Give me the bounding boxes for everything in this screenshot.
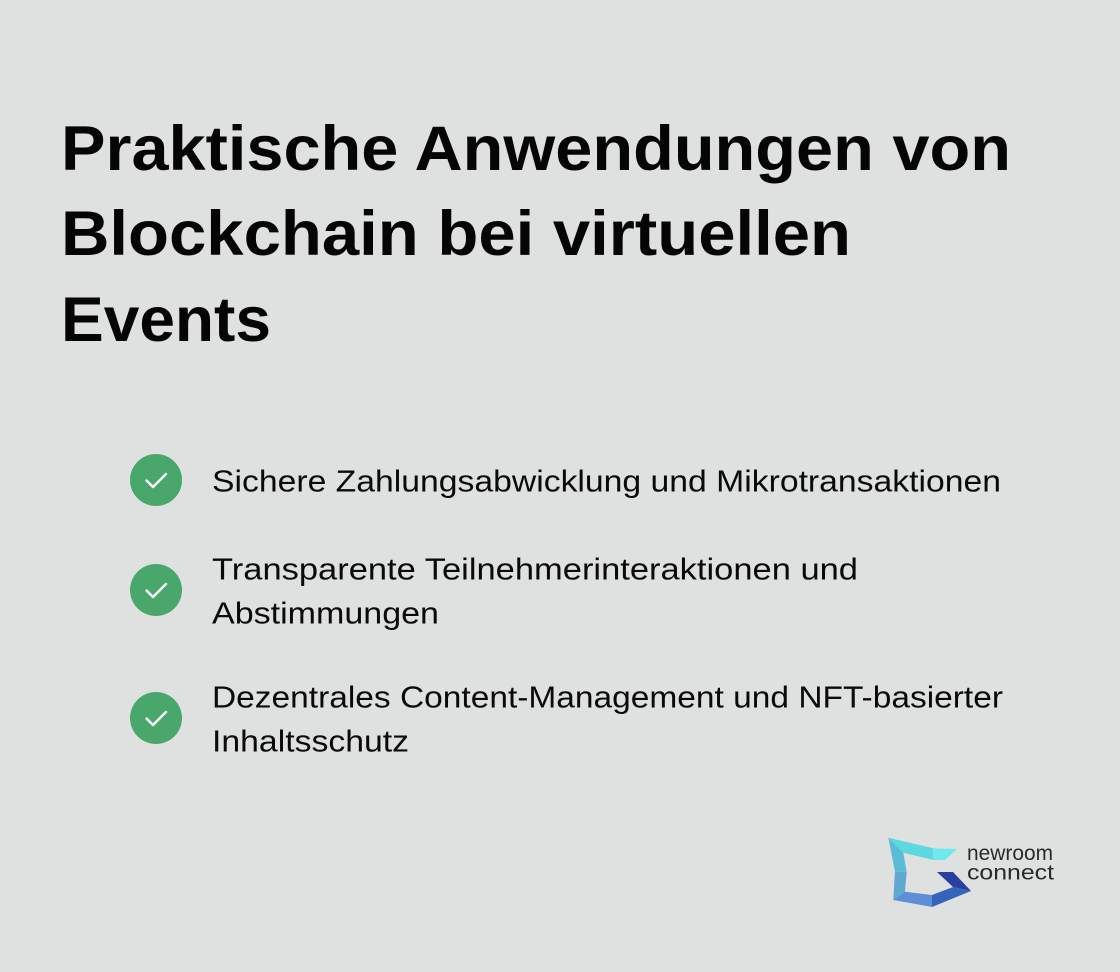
logo mark [888, 838, 971, 907]
icon: check mark [130, 692, 182, 744]
item text: Abstimmungen [212, 596, 439, 630]
list item: content management [130, 680, 1003, 758]
title: Praktische Anwendungen von [61, 114, 1011, 184]
logo wordmark [967, 842, 1054, 884]
checklist [130, 454, 1003, 758]
logo: newroom connect [888, 838, 1054, 907]
title: Blockchain bei virtuellen [61, 199, 851, 269]
list item: payments [130, 454, 1001, 506]
item text [212, 552, 858, 630]
icon: check mark [130, 564, 182, 616]
item text: Transparente Teilnehmerinteraktionen und [212, 552, 858, 586]
item text: Dezentrales Content-Management und NFT-basierter [212, 680, 1003, 714]
item text: Inhaltsschutz [212, 724, 409, 758]
title: Events [61, 285, 271, 355]
item text: Sichere Zahlungsabwicklung und Mikrotransaktionen [212, 464, 1001, 498]
logo wordmark: newroom [967, 842, 1053, 865]
list item: interactions [130, 552, 858, 630]
logo wordmark: connect [967, 862, 1054, 884]
icon: check mark [130, 454, 182, 506]
item text [212, 680, 1003, 758]
title [61, 114, 1011, 355]
